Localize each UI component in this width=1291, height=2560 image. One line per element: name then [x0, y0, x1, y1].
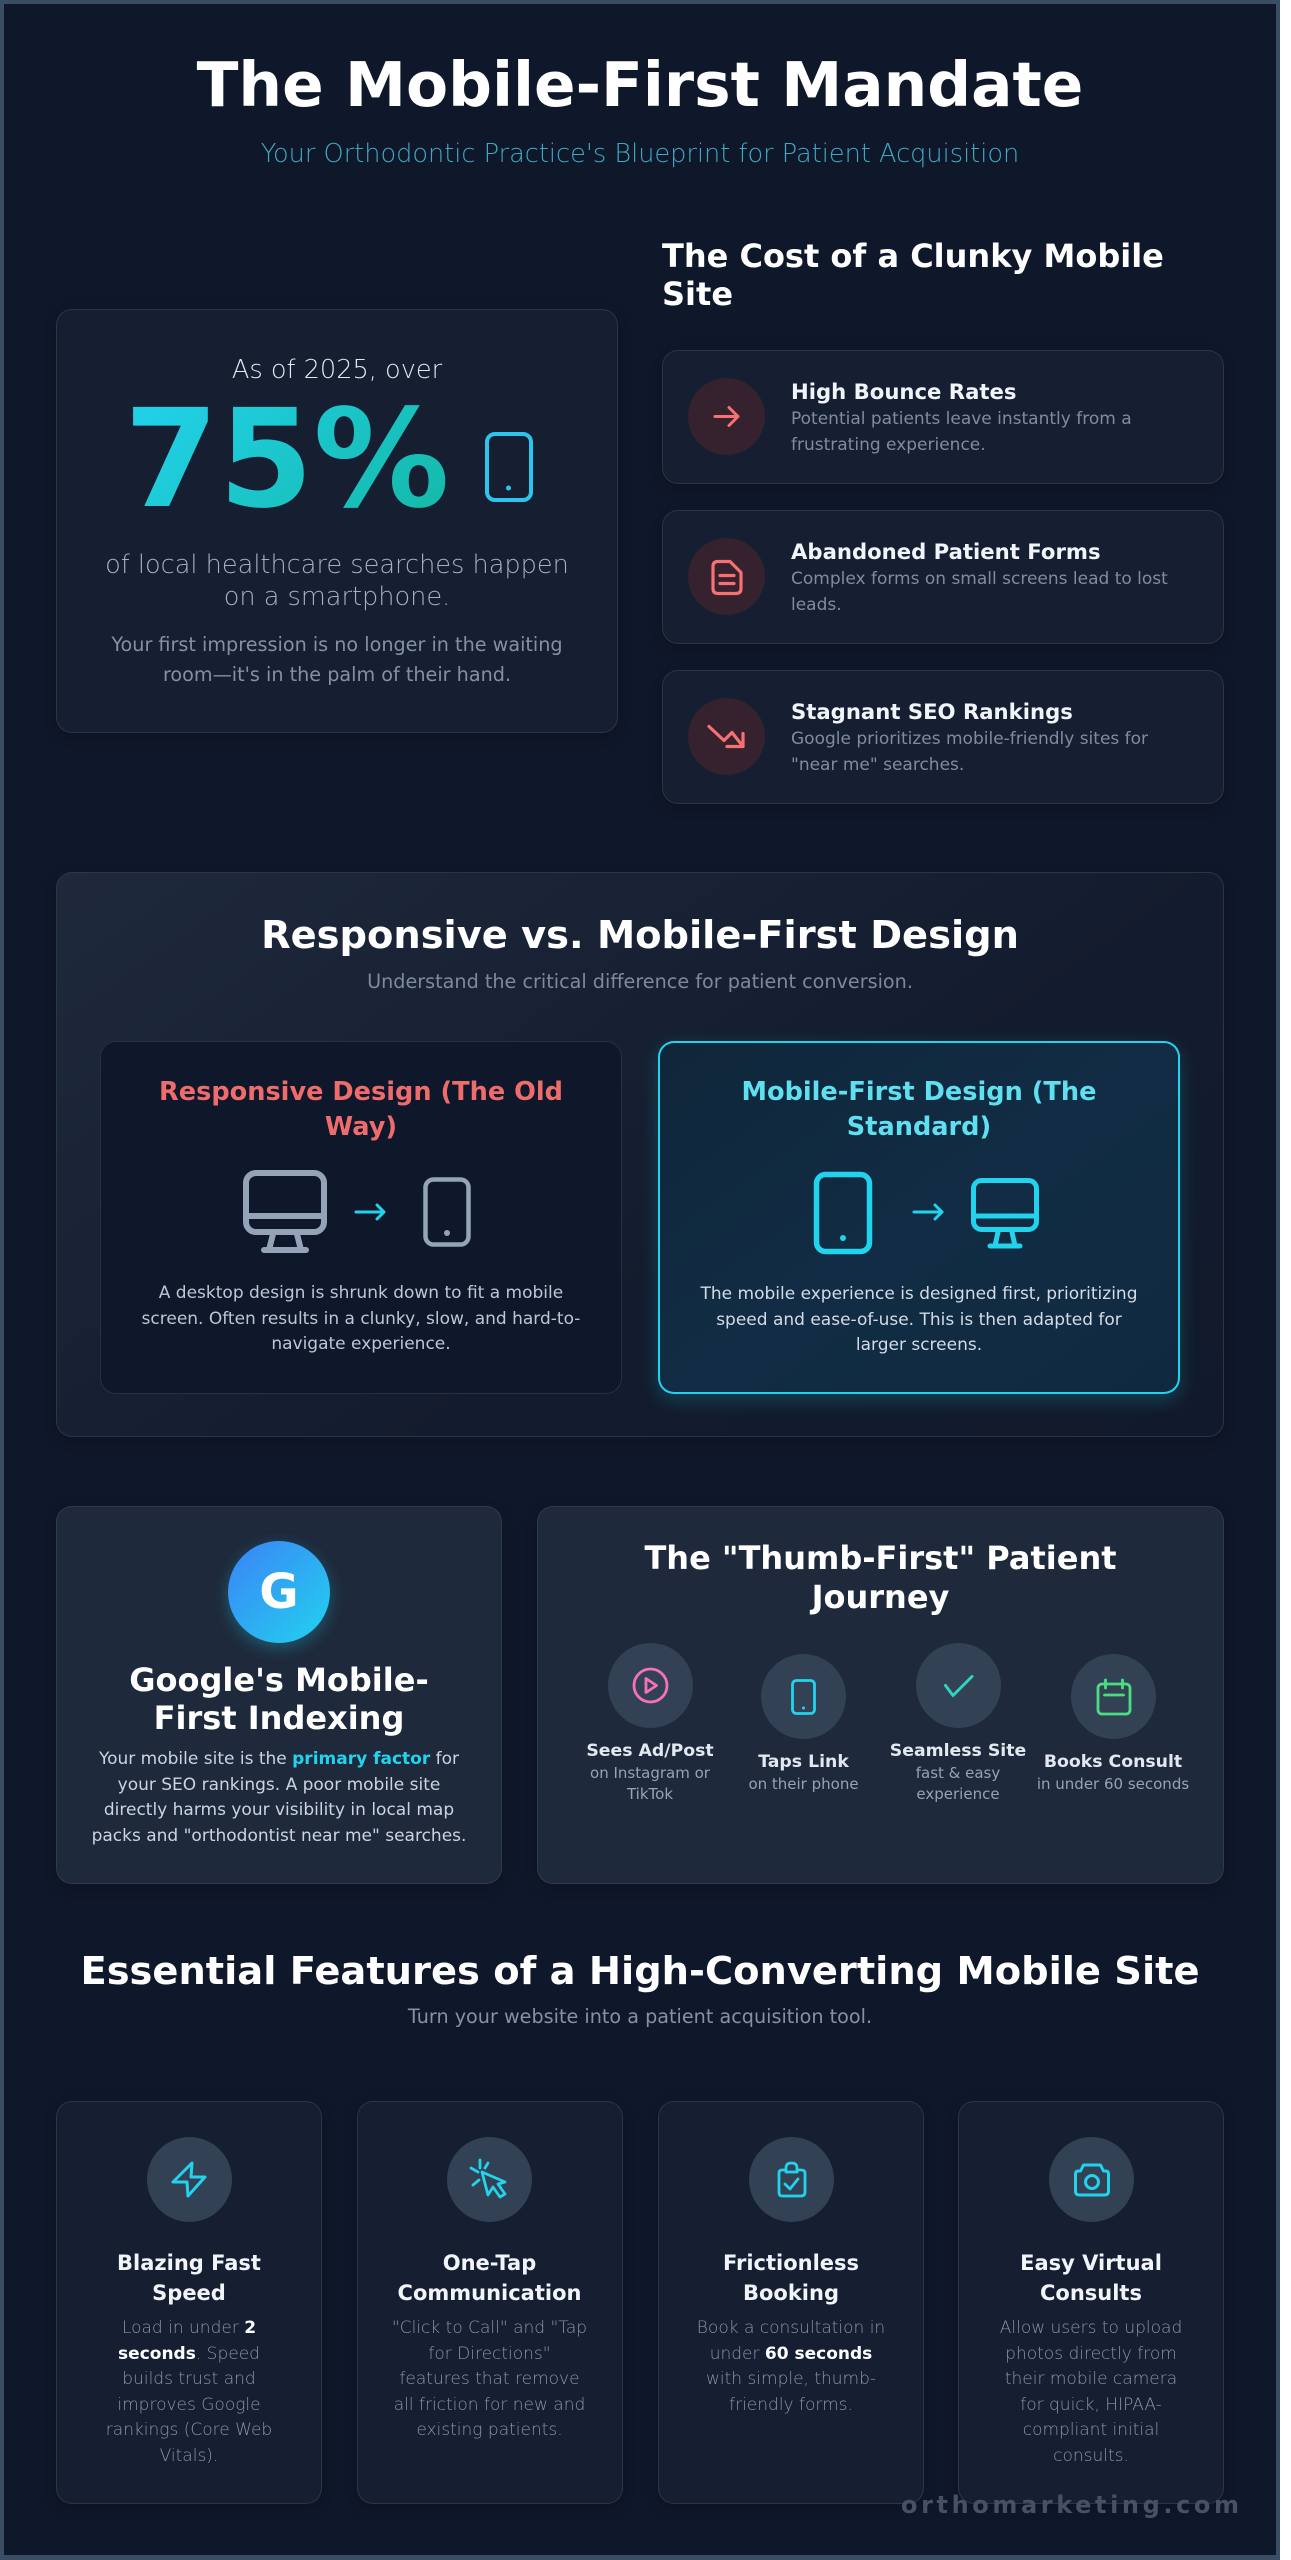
step title: Books Consult: [1044, 1752, 1182, 1772]
card title: Speed: [152, 2281, 226, 2305]
icon: play circle: [608, 1643, 692, 1728]
card title: One-Tap: [443, 2251, 536, 2275]
step text: [916, 1764, 1000, 1803]
card text: frustrating experience.: [791, 434, 986, 454]
card: stagnant SEO rankings: [662, 670, 1224, 804]
heading: Site: [662, 275, 733, 313]
card text: [106, 2318, 272, 2466]
card text: Google prioritizes mobile-friendly sites for: [791, 729, 1148, 749]
card text: [142, 1283, 580, 1354]
card: abandoned patient forms: [662, 510, 1224, 644]
card text: all friction for new and: [394, 2395, 585, 2415]
icon: G badge: [228, 1541, 330, 1643]
heading: [644, 1539, 1117, 1616]
step text: fast & easy: [916, 1764, 1000, 1782]
stat note: room—it's in the palm of their hand.: [163, 663, 511, 686]
paragraph: your SEO rankings. A poor mobile site: [118, 1775, 440, 1795]
card text: larger screens.: [856, 1335, 982, 1355]
card title: [1020, 2251, 1162, 2305]
watermark: orthomarketing.com: [901, 2491, 1243, 2519]
card text: Vitals).: [160, 2446, 218, 2466]
card text: friendly forms.: [729, 2395, 853, 2415]
step text: in under 60 seconds: [1037, 1775, 1189, 1793]
card text: A desktop design is shrunk down to fit a mobile: [159, 1283, 563, 1303]
stat description: of local healthcare searches happen: [105, 550, 569, 580]
icon: check: [916, 1643, 1000, 1728]
card heading: [742, 1077, 1096, 1142]
card text: builds trust and: [122, 2369, 256, 2389]
heading: Journey: [812, 1578, 949, 1616]
section subheading: Understand the critical difference for patient conversion.: [367, 970, 913, 993]
card title: [117, 2251, 261, 2305]
icon: mobile to desktop: [814, 1172, 1039, 1254]
card text: navigate experience.: [271, 1334, 451, 1354]
paragraph: [92, 1749, 466, 1846]
card: one-tap communication: [356, 2101, 622, 2504]
subheading: Turn your website into a patient acquisition tool.: [408, 2005, 872, 2028]
card text: for Directions": [428, 2344, 551, 2364]
card title: Blazing Fast: [117, 2251, 261, 2275]
icon: lightning bolt: [146, 2137, 232, 2222]
card: easy virtual consults: [958, 2101, 1224, 2504]
panel: thumb-first patient journey: [537, 1506, 1224, 1884]
step: sees ad/post: [586, 1643, 714, 1803]
card text: Load in under 2: [122, 2318, 256, 2338]
heading: [129, 1661, 429, 1737]
card text: seconds. Speed: [118, 2344, 260, 2364]
card text: Allow users to upload: [1000, 2318, 1182, 2338]
heading: [662, 237, 1164, 313]
step title: Seamless Site: [890, 1741, 1026, 1761]
card title: Frictionless: [723, 2251, 859, 2275]
card heading: Responsive Design (The Old: [159, 1077, 563, 1107]
card title: Easy Virtual: [1020, 2251, 1162, 2275]
card text: Potential patients leave instantly from a: [791, 409, 1132, 429]
step title: Sees Ad/Post: [586, 1741, 714, 1761]
card: blazing fast speed: [56, 2101, 322, 2504]
card: responsive design: [100, 1041, 622, 1394]
subtitle: Your Orthodontic Practice's Blueprint for Patient Acquisition: [261, 139, 1019, 169]
icon: trending down: [688, 698, 765, 775]
heading: Google's Mobile-: [129, 1661, 429, 1699]
card text: for quick, HIPAA-: [1020, 2395, 1162, 2415]
heading: Essential Features of a High-Converting Mobile Site: [80, 1949, 1200, 1994]
icon: cursor click: [447, 2137, 532, 2222]
card text: consults.: [1053, 2446, 1129, 2466]
step: books consult: [1037, 1654, 1189, 1793]
card text: screen. Often results in a clunky, slow, and hard-to-: [142, 1309, 580, 1329]
card text: [791, 409, 1132, 454]
paragraph: directly harms your visibility in local map: [104, 1800, 454, 1820]
step text: TikTok: [627, 1785, 673, 1803]
panel: responsive vs mobile-first: [56, 872, 1224, 1437]
heading: The "Thumb-First" Patient: [644, 1539, 1117, 1577]
icon: document: [688, 538, 765, 615]
panel: cost of a clunky mobile site: [662, 237, 1224, 804]
step text: on their phone: [748, 1775, 859, 1793]
panel: 75% statistic: [56, 309, 618, 733]
card text: speed and ease-of-use. This is then adapted for: [716, 1310, 1122, 1330]
step title: Taps Link: [758, 1752, 849, 1772]
card text: [392, 2318, 587, 2440]
big number 75%: 75%: [124, 381, 450, 539]
card: mobile-first design: [658, 1041, 1180, 1394]
card text: [791, 569, 1168, 614]
paragraph: packs and "orthodontist near me" searches.: [92, 1826, 466, 1846]
icon: calendar: [1070, 1654, 1156, 1739]
icon: arrow right: [688, 378, 765, 455]
card text: with simple, thumb-: [706, 2369, 876, 2389]
card text: [697, 2318, 885, 2415]
step text: on Instagram or: [590, 1764, 710, 1782]
card text: compliant initial: [1023, 2420, 1159, 2440]
step text: experience: [916, 1785, 1000, 1803]
card text: Book a consultation in: [697, 2318, 885, 2338]
card text: [791, 729, 1148, 774]
card text: under 60 seconds: [710, 2344, 872, 2364]
card title: [398, 2251, 581, 2305]
card text: photos directly from: [1005, 2344, 1177, 2364]
card text: improves Google: [117, 2395, 261, 2415]
card title: [723, 2251, 859, 2305]
card text: Complex forms on small screens lead to lost: [791, 569, 1168, 589]
card heading: Mobile-First Design (The: [742, 1077, 1096, 1107]
section header: essential features: [80, 1949, 1200, 2028]
card text: [700, 1284, 1138, 1355]
paragraph: Your mobile site is the primary factor for: [99, 1749, 459, 1769]
icon: clipboard check: [748, 2137, 834, 2222]
icon: phone: [761, 1654, 846, 1739]
stat intro: As of 2025, over: [232, 355, 442, 385]
card heading: Standard): [847, 1112, 991, 1142]
card text: "near me" searches.: [791, 754, 964, 774]
stat description: on a smartphone.: [224, 582, 450, 612]
heading: First Indexing: [154, 1699, 404, 1737]
icon: camera: [1048, 2137, 1134, 2222]
card title: Communication: [398, 2281, 581, 2305]
stat note: Your first impression is no longer in the waiting: [111, 633, 563, 656]
card text: "Click to Call" and "Tap: [392, 2318, 587, 2338]
icon: G badge: G: [259, 1564, 299, 1620]
stat description: [105, 550, 569, 612]
stat note: [111, 633, 563, 686]
step text: [590, 1764, 710, 1803]
card title: Abandoned Patient Forms: [791, 539, 1101, 564]
card text: The mobile experience is designed first, prioritizing: [700, 1284, 1138, 1304]
title: The Mobile-First Mandate: [197, 50, 1083, 121]
step: seamless site: [890, 1643, 1026, 1803]
heading: The Cost of a Clunky Mobile: [662, 237, 1164, 275]
card text: existing patients.: [416, 2420, 563, 2440]
card text: features that remove: [399, 2369, 580, 2389]
section heading: Responsive vs. Mobile-First Design: [261, 913, 1019, 958]
panel: google mobile-first indexing: [56, 1506, 502, 1884]
card: frictionless booking: [658, 2101, 924, 2504]
card text: [1000, 2318, 1182, 2466]
card: high bounce rates: [662, 350, 1224, 484]
card text: rankings (Core Web: [106, 2420, 272, 2440]
card text: their mobile camera: [1005, 2369, 1177, 2389]
card heading: [159, 1077, 563, 1142]
card title: High Bounce Rates: [791, 379, 1017, 404]
card title: Stagnant SEO Rankings: [791, 699, 1073, 724]
step: taps link: [748, 1654, 859, 1793]
card title: Booking: [743, 2281, 839, 2305]
icon: desktop to mobile: [243, 1170, 471, 1253]
card heading: Way): [325, 1112, 397, 1142]
card title: Consults: [1040, 2281, 1142, 2305]
card text: leads.: [791, 594, 842, 614]
icon: smartphone: [485, 432, 533, 502]
